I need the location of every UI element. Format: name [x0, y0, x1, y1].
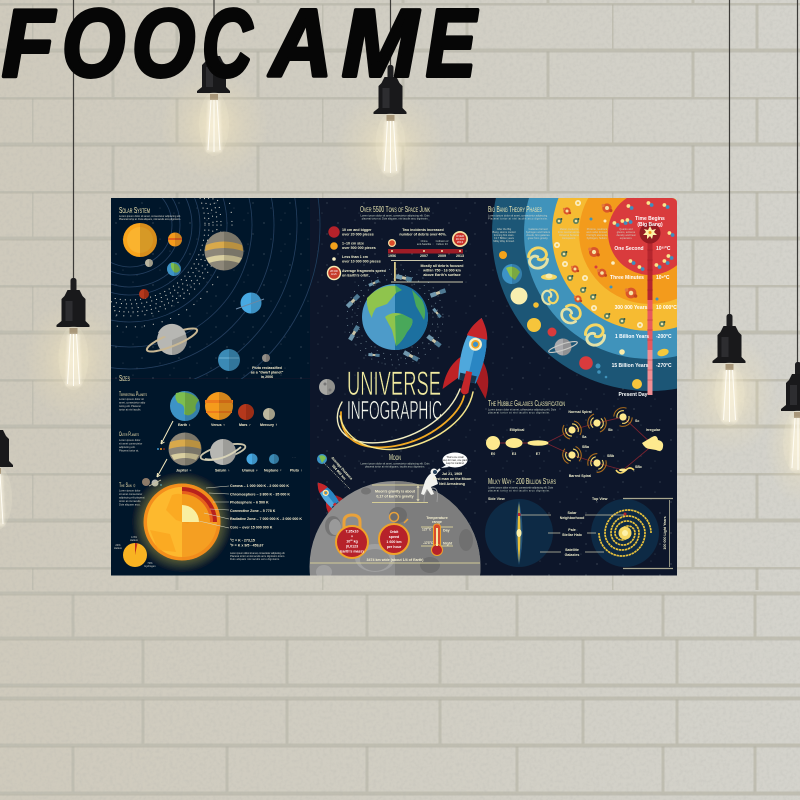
text: the sun: sit amet consectetur — [119, 492, 142, 496]
moon mass kettlebell: × — [351, 534, 353, 538]
phase descriptions: Milky Way formed. — [493, 239, 515, 243]
moon temperature thermometer: 127°C — [422, 528, 432, 532]
speech bubble: step for man, one giant — [443, 459, 468, 462]
moon temperature thermometer — [421, 516, 453, 556]
debris altitude note: within 750 - 16 000 km — [422, 268, 461, 272]
side view: Side View — [488, 497, 505, 501]
time labels: 15 Billion Years — [612, 363, 649, 369]
text: the sun: Lorem ipsum dolor — [119, 488, 141, 492]
top view spiral — [591, 497, 659, 567]
moon orbit speed stopwatch: speed — [389, 535, 399, 539]
title word universe: UNIVERSE — [347, 365, 441, 403]
time labels: 10⁹°C — [656, 275, 670, 281]
timeline — [388, 231, 468, 258]
planet: earth — [167, 262, 181, 276]
size: uranus: Uranus ♅ — [242, 468, 258, 472]
lamp far left edge — [0, 418, 13, 530]
intro text: moon: placerat tortor at nisi aliquam, iaculis arcu dignissim. — [365, 464, 425, 468]
intro text: space junk: placerat tortor at. Duis aliquam, nisi iaculis arcu dignissim. — [362, 216, 429, 220]
particles in red core — [612, 201, 674, 271]
tuning fork connectors — [493, 417, 653, 470]
galaxies in blue ring — [526, 246, 670, 357]
phase descriptions: and nuclei formed, — [586, 230, 608, 234]
moon mass kettlebell — [336, 515, 368, 558]
size: saturn: Saturn ♄ — [215, 468, 230, 472]
timeline: 2009 — [438, 254, 446, 258]
panel: moon — [309, 452, 480, 652]
intro text: solar system: Placerat tortor at. Duis aliquam, nisi iaculis arcu dignissim. — [119, 217, 181, 221]
title: solar system: Solar System — [119, 206, 150, 215]
planet: pluto — [262, 354, 270, 362]
moon gravity note — [372, 485, 428, 502]
timeline heading: Two incidents increased — [402, 228, 444, 232]
timeline: 16 000 — [456, 237, 465, 241]
debris: large — [328, 226, 374, 238]
time labels — [610, 216, 677, 398]
debris speed: km/h — [331, 273, 337, 276]
intro text: hubble — [488, 408, 557, 414]
debris: medium — [330, 242, 376, 250]
phase descriptions: first light elements — [587, 233, 608, 237]
size: pluto — [290, 457, 302, 472]
moon gravity note: 0,17 of Earth's gravity — [376, 494, 414, 498]
time labels: One Second — [614, 246, 644, 252]
satellites — [346, 274, 446, 362]
big bang burst — [640, 222, 660, 244]
lamp top centre — [374, 65, 406, 177]
sun layer labels: Convective Zone – 5 778 K — [230, 509, 276, 513]
poster: universe infographic — [111, 198, 677, 576]
size: pluto: Pluto ♇ — [290, 468, 303, 472]
milky way labels: Solar — [568, 511, 577, 515]
moon orbit speed stopwatch: 1 600 km — [386, 540, 402, 544]
diameter bracket: 100 000 Light Years — [663, 516, 667, 550]
text: outer planets: Placerat tortor at. — [119, 448, 139, 452]
pie chart: sun composition: 24% — [115, 543, 121, 547]
planet: venus — [168, 232, 182, 246]
earth-moon distance: Average Distance — [330, 456, 353, 481]
size: mercury: Mercury ☿ — [260, 423, 278, 427]
phase descriptions: Bang, atoms cooled — [493, 230, 516, 234]
timeline: anti-Satellite — [417, 242, 432, 246]
intro text: big bang: Lorem ipsum dolor sit amet, consectetur adipiscing. — [488, 214, 548, 218]
barred spirals: SBb — [607, 454, 615, 458]
size: mars: Mars ♂ — [239, 423, 251, 427]
speech bubble: leap for mankind — [446, 462, 465, 465]
earth-moon distance — [317, 454, 353, 489]
time labels: -270°C — [656, 363, 672, 369]
text: the sun: adipiscing elit placerat — [119, 496, 145, 500]
timeline: 2013 — [457, 240, 464, 244]
size: earth: Earth ♁ — [178, 423, 191, 427]
title: milky way: Milky Way - 200 Billion Stars — [488, 477, 556, 486]
intro text: milky way: placerat tortor at nisi iaculis arcu dignissim. — [488, 488, 550, 492]
sun layer labels: Radiative Zone – 7 000 000 K - 2 000 000 K — [230, 517, 302, 521]
timeline: 2007 — [420, 254, 428, 258]
timeline: 1956 — [388, 254, 396, 258]
planet: mercury — [145, 259, 153, 267]
barred spirals — [561, 445, 642, 478]
text: the sun: tortor at nisi iaculis. — [119, 499, 141, 503]
time labels: 10 000°C — [656, 305, 677, 311]
intro text: moon: Lorem ipsum dolor sit amet, consectetur adipiscing elit. Duis — [360, 462, 430, 466]
diameter bracket — [623, 498, 673, 568]
timeline: 2013 — [456, 254, 464, 258]
normal spirals: Normal Spiral — [568, 410, 592, 414]
title: moon: Moon — [389, 453, 401, 462]
intro text: big bang — [488, 214, 548, 220]
astronaut — [421, 468, 440, 495]
time labels: 300 000 Years — [615, 305, 648, 311]
asteroid belt — [111, 198, 233, 328]
barred spirals: SBc — [635, 465, 642, 469]
phase descriptions: 13.7 Billion years — [494, 236, 515, 240]
text: the sun: Duis aliquam arcu. — [119, 502, 141, 506]
debris speed — [327, 266, 386, 280]
intro text: solar system — [119, 215, 181, 220]
moon mass kettlebell: Earth's mass) — [340, 550, 365, 554]
intro text: space junk: Lorem ipsum dolor sit amet, consectetur adipiscing elit. Duis — [360, 214, 430, 218]
pie chart: sun composition: Hydrogen — [144, 564, 156, 568]
speech bubble — [441, 452, 468, 468]
planet: neptune — [218, 349, 240, 371]
elliptical galaxies — [486, 428, 548, 456]
moon mass kettlebell: 7,35x10 — [346, 530, 358, 534]
title: outer planets: Outer Planets — [119, 432, 139, 438]
pluto note: as a "dwarf planet" — [251, 370, 284, 374]
size: saturn — [199, 439, 247, 472]
phase descriptions: Galaxies formed — [529, 227, 548, 231]
planet: saturn — [145, 324, 199, 356]
sun layer labels: Lorem ipsum dolor sit amet, consectetur adipiscing elit. — [230, 551, 285, 555]
elliptical galaxies: Elliptical — [510, 428, 524, 432]
debris: medium: 1–10 cm size — [342, 242, 364, 246]
atoms in yellow ring — [554, 200, 665, 328]
first man caption: First man on the Moon — [433, 477, 471, 481]
intro text: solar system: Lorem ipsum dolor sit amet, consectetur adipiscing elit. — [119, 214, 181, 218]
sun layer labels: Core – over 15 000 000 K — [230, 526, 273, 530]
size: pluto: · · · — [292, 456, 296, 459]
intro text: milky way: Lorem ipsum dolor sit amet, consectetur adipiscing elit. Duis — [488, 486, 554, 490]
pluto note: Pluto reclassified — [252, 366, 282, 370]
elliptical galaxies: E3 — [512, 452, 516, 456]
time labels: 1 Billion Years — [615, 334, 649, 340]
timeline heading — [399, 228, 447, 236]
panel: hubble galaxies classification — [486, 399, 663, 478]
lamp right — [712, 314, 746, 426]
title: hubble: The Hubble Galaxies Classification — [488, 399, 565, 408]
moon orbit speed stopwatch — [379, 512, 409, 554]
time labels: -200°C — [656, 334, 672, 340]
phase descriptions: After the Big — [497, 227, 512, 231]
small bodies beside sun — [142, 478, 162, 486]
size: earth — [170, 391, 200, 427]
milky way labels: Satellite — [565, 548, 579, 552]
title: space junk: Over 5500 Tons of Space Junk — [360, 205, 430, 214]
text: terrestrial planets: tortor at nisi iaculis. — [119, 408, 141, 412]
phase descriptions: expansion. — [620, 236, 633, 240]
sun cross-section — [132, 472, 232, 572]
phase descriptions: Protons, neutrons — [587, 227, 608, 231]
phase descriptions — [493, 227, 636, 243]
size: neptune: Neptune ♆ — [264, 468, 282, 472]
normal spirals: Sc — [635, 419, 639, 423]
debris field stars — [347, 269, 443, 365]
irregular galaxy — [642, 428, 663, 451]
moon temperature thermometer: range — [432, 520, 442, 524]
lamp top left — [197, 44, 230, 156]
phase descriptions: Universe became — [559, 233, 580, 237]
moon mass kettlebell: (0,0123 — [346, 544, 358, 548]
moon orbit speed stopwatch: per hour — [387, 545, 402, 549]
main title — [319, 365, 473, 450]
timeline: OVER — [456, 234, 464, 238]
phase descriptions: Quarks and — [619, 227, 633, 231]
pendant lamp cords — [74, 0, 798, 365]
orbits — [0, 35, 320, 415]
title: terrestrial planets: Terrestrial Planets — [119, 392, 147, 398]
phase descriptions: transparent. — [562, 236, 576, 240]
planet: jupiter — [204, 232, 244, 270]
time labels: 10³²°C — [656, 246, 671, 252]
big rocket — [442, 313, 503, 399]
sun layer labels: °C = K - 273,15 — [230, 538, 255, 542]
sun layer labels: Chromosphere – 3 800 K - 35 000 K — [230, 492, 290, 496]
small rocket — [309, 476, 349, 519]
intro text: moon — [360, 462, 430, 468]
normal spirals: Sa — [582, 435, 587, 439]
sun layer labels — [199, 484, 302, 561]
top view spiral: Top View — [592, 497, 608, 501]
milky way labels — [521, 511, 624, 557]
lamp far right edge — [781, 362, 800, 474]
phase descriptions: gluons, extreme — [617, 230, 636, 234]
text: outer planets — [119, 439, 142, 452]
text: outer planets: Lorem ipsum dolor — [119, 438, 141, 442]
pie chart: sun composition: 4.9% — [131, 535, 138, 539]
sun layer labels: Placerat tortor at nisi iaculis arcu dignissim lorem. — [230, 554, 285, 558]
side view — [485, 497, 553, 567]
objects in dark ring — [499, 251, 642, 389]
panel: milky way — [485, 477, 673, 568]
intro text: big bang: Placerat tortor at nisi iaculis arcu dignissim. — [488, 216, 548, 220]
barred spirals: SBa — [582, 445, 590, 449]
timeline: China — [421, 239, 428, 243]
text: terrestrial planets: amet, consectetur adip — [119, 400, 146, 404]
panel: sizes — [111, 374, 310, 576]
debris: small — [332, 255, 381, 264]
timeline: Collision of — [436, 239, 449, 243]
intro text: hubble: placerat tortor at nisi iaculis arcu dignissim. — [488, 410, 550, 414]
sun layer labels: Corona – 1 000 000 K - 2 000 000 K — [230, 484, 289, 488]
panel: big bang theory phases — [488, 75, 800, 398]
size: venus — [205, 392, 233, 427]
time labels: Present Day — [619, 392, 648, 398]
size: neptune — [264, 454, 282, 472]
timeline column — [647, 240, 653, 395]
planet: mars — [139, 289, 149, 299]
lamp left — [56, 278, 90, 390]
panel: solar system — [0, 35, 320, 415]
text: outer planets: adipiscing elit. — [119, 445, 136, 449]
normal spirals: Sb — [608, 428, 613, 432]
title: the sun: The Sun ☼ — [119, 483, 136, 489]
concentric phases — [492, 75, 800, 391]
debris: medium: over 500 000 pieces — [342, 246, 376, 250]
debris: large: over 20 000 pieces — [342, 232, 374, 236]
timeline: Iridium 33 — [436, 242, 448, 246]
text: outer planets: sit amet consectetur — [119, 442, 142, 446]
text: terrestrial planets: Lorem ipsum dolor sit — [119, 397, 144, 401]
size: mercury — [260, 408, 278, 427]
pie chart: sun composition — [114, 535, 156, 568]
earth-moon distance: 384 000 km — [331, 464, 347, 481]
phase descriptions: density and heat — [616, 233, 636, 237]
phase descriptions: form neutral atoms. — [558, 230, 580, 234]
first man caption — [433, 472, 471, 486]
planet: uranus — [236, 292, 264, 314]
intro text: milky way — [488, 486, 554, 492]
debris: large: 10 cm and bigger — [342, 228, 372, 232]
milky way labels: Stellar Halo — [562, 533, 583, 537]
brand logo FOOCAME — [2, 0, 478, 97]
title: big bang: Big Bang Theory Phases — [488, 205, 542, 214]
debris: small: over 10 000 000 pieces — [342, 260, 381, 264]
phase descriptions: clouds, first galaxies — [526, 233, 550, 237]
title: sizes: Sizes — [119, 374, 130, 383]
moon temperature thermometer: Temperature — [426, 516, 448, 520]
pie chart: sun composition: Helium — [130, 538, 138, 542]
title word infographic: INFOGRAPHIC — [347, 395, 442, 425]
irregular galaxy: Irregular — [646, 428, 661, 432]
normal spirals — [563, 406, 639, 439]
first man caption: Jul 21, 1969 — [442, 472, 462, 476]
size: venus: Venus ♀ — [211, 423, 225, 427]
intro text: space junk — [360, 214, 430, 220]
size: mars — [238, 404, 254, 427]
moon surface — [310, 481, 480, 652]
globe — [362, 284, 428, 350]
text: the sun — [119, 488, 145, 506]
debris speed: Average fragments speed — [342, 269, 386, 273]
size: uranus — [242, 454, 258, 472]
planet: sun — [123, 223, 157, 257]
title: small moon — [319, 379, 335, 395]
phase descriptions: hydrogen, helium. — [587, 236, 608, 240]
arrows to size comparison — [157, 421, 173, 477]
time labels: Time Begins — [635, 216, 665, 222]
time labels: (Big Bang) — [637, 222, 663, 228]
intro text: hubble: Lorem ipsum dolor sit amet, consectetur adipiscing elit. Duis — [488, 408, 557, 412]
text: terrestrial planets — [119, 398, 146, 410]
pie chart: sun composition: 73% — [147, 561, 153, 565]
phase descriptions: forming first stars. — [494, 233, 515, 237]
pluto note — [250, 366, 284, 378]
phase descriptions: grew from gravity. — [528, 236, 548, 240]
debris speed: on Earth's orbit — [342, 274, 369, 278]
moon diameter bar: 3474 km wide (about 1/4 of Earth) — [367, 558, 424, 562]
size: jupiter: Jupiter ♃ — [176, 468, 192, 472]
panel: space junk — [327, 205, 468, 365]
moon temperature thermometer: Day — [443, 528, 450, 532]
sun layer labels: Duis aliquam nisi iaculis arcu dignissim. — [230, 557, 280, 561]
milky way labels: Neighborhood — [560, 516, 584, 520]
sun layer labels: Photosphere – 6 500 K — [230, 500, 269, 504]
barred spirals: Barred Spiral — [569, 474, 591, 478]
swoosh trails — [337, 389, 473, 450]
debris altitude note: Mostly all debris focused — [421, 264, 463, 268]
size: jupiter — [168, 432, 202, 472]
text: terrestrial planets: iscing elit. Placerat — [119, 404, 141, 408]
moon orbit speed stopwatch: Orbit — [390, 530, 399, 534]
moon mass kettlebell: 10²² kg — [346, 540, 358, 544]
moon temperature thermometer: -173°C — [423, 541, 434, 545]
timeline heading: number of debris over 40%. — [399, 232, 447, 236]
milky way labels: Galaxies — [565, 553, 579, 557]
atoms in orange ring — [588, 203, 658, 300]
debris: small: Less than 1 cm — [342, 255, 368, 259]
elliptical galaxies: E7 — [536, 452, 540, 456]
pie chart: sun composition: Helium — [114, 546, 122, 550]
phase descriptions: hydrogen and helium — [526, 230, 550, 234]
moon gravity note: Moon's gravity is about — [375, 490, 416, 494]
time labels: Three Minutes — [610, 275, 644, 281]
mini planets marker — [157, 448, 165, 450]
first man caption: Neil Armstrong — [439, 482, 465, 486]
debris altitude note — [391, 260, 463, 282]
moon temperature thermometer: Night — [443, 542, 453, 546]
debris speed: 28 000 — [330, 270, 338, 273]
speech bubble: That's one small — [446, 456, 464, 459]
debris altitude note: above Earth's surface — [423, 273, 461, 277]
milky way labels: Pale — [568, 528, 576, 532]
pluto note: in 2006 — [261, 375, 273, 379]
elliptical galaxies: E0 — [491, 452, 495, 456]
sun layer labels: °F = K x 9/5 - 459,67 — [230, 544, 264, 548]
phase descriptions: Matter cooled to — [560, 227, 579, 231]
